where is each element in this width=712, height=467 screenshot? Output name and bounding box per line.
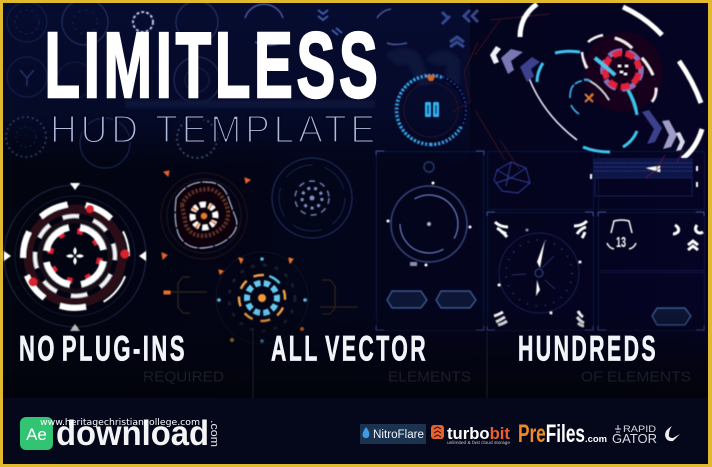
feature: all vector: ALL VECTOR	[271, 330, 428, 368]
ghost HUD pattern behind title	[6, 0, 478, 168]
logo: rapid gator: RAPID	[623, 424, 656, 435]
ghost letters behind title	[125, 48, 460, 108]
title: LIMITLESS	[44, 13, 382, 117]
panel frames: right side	[376, 151, 704, 330]
feature: hundreds	[518, 330, 691, 386]
bottom fade	[0, 310, 712, 400]
logo: nitroflare	[360, 424, 426, 444]
logo: ae download: Ae	[26, 425, 47, 444]
logo: rapid gator: GATOR	[612, 432, 657, 446]
feature: all vector	[271, 330, 471, 386]
hud: faded blue dial	[272, 158, 352, 238]
logo: turbobit: turbobit	[447, 424, 510, 443]
logo: rapid gator	[612, 424, 680, 446]
hud: shield with number: 13	[616, 234, 626, 251]
hud: blue and orange dial	[164, 252, 358, 344]
hud: polygon wireframe	[494, 162, 530, 193]
hud: hexagon buttons	[387, 291, 691, 325]
logo: turbobit: unlimited & fast cloud storage	[447, 440, 511, 445]
feature: no plug-ins: NO PLUG-INS	[19, 330, 187, 368]
logo: prefiles: PreFiles	[518, 420, 585, 448]
logo: ae download: download	[56, 414, 209, 453]
bottom strip	[0, 398, 712, 467]
hud: large red and white dial	[2, 183, 148, 331]
logo: ae download: .com	[208, 420, 220, 447]
watermark: www.heritagechristiancollege.com	[40, 418, 200, 428]
logo: nitroflare: NitroFlare	[373, 429, 424, 441]
subtitle: HUD TEMPLATE	[50, 108, 379, 152]
feature: all vector: ELEMENTS	[388, 368, 471, 386]
hud: panel with rotating gauge	[386, 162, 472, 266]
dividers	[253, 328, 487, 398]
feature: hundreds: OF ELEMENTS	[581, 368, 691, 386]
hud: digital timer gauge	[386, 65, 476, 155]
feature: no plug-ins	[19, 330, 224, 386]
hud: orange and white blob dial	[161, 171, 250, 259]
hud: shield with number	[607, 220, 636, 251]
hud: white corner chevrons	[494, 221, 703, 326]
hud: large tilted target	[452, 4, 702, 170]
feature: no plug-ins: REQUIRED	[143, 368, 224, 386]
hud: compass	[498, 228, 582, 314]
logo: prefiles: .com	[585, 434, 607, 445]
hud: data bar panel	[590, 150, 698, 196]
